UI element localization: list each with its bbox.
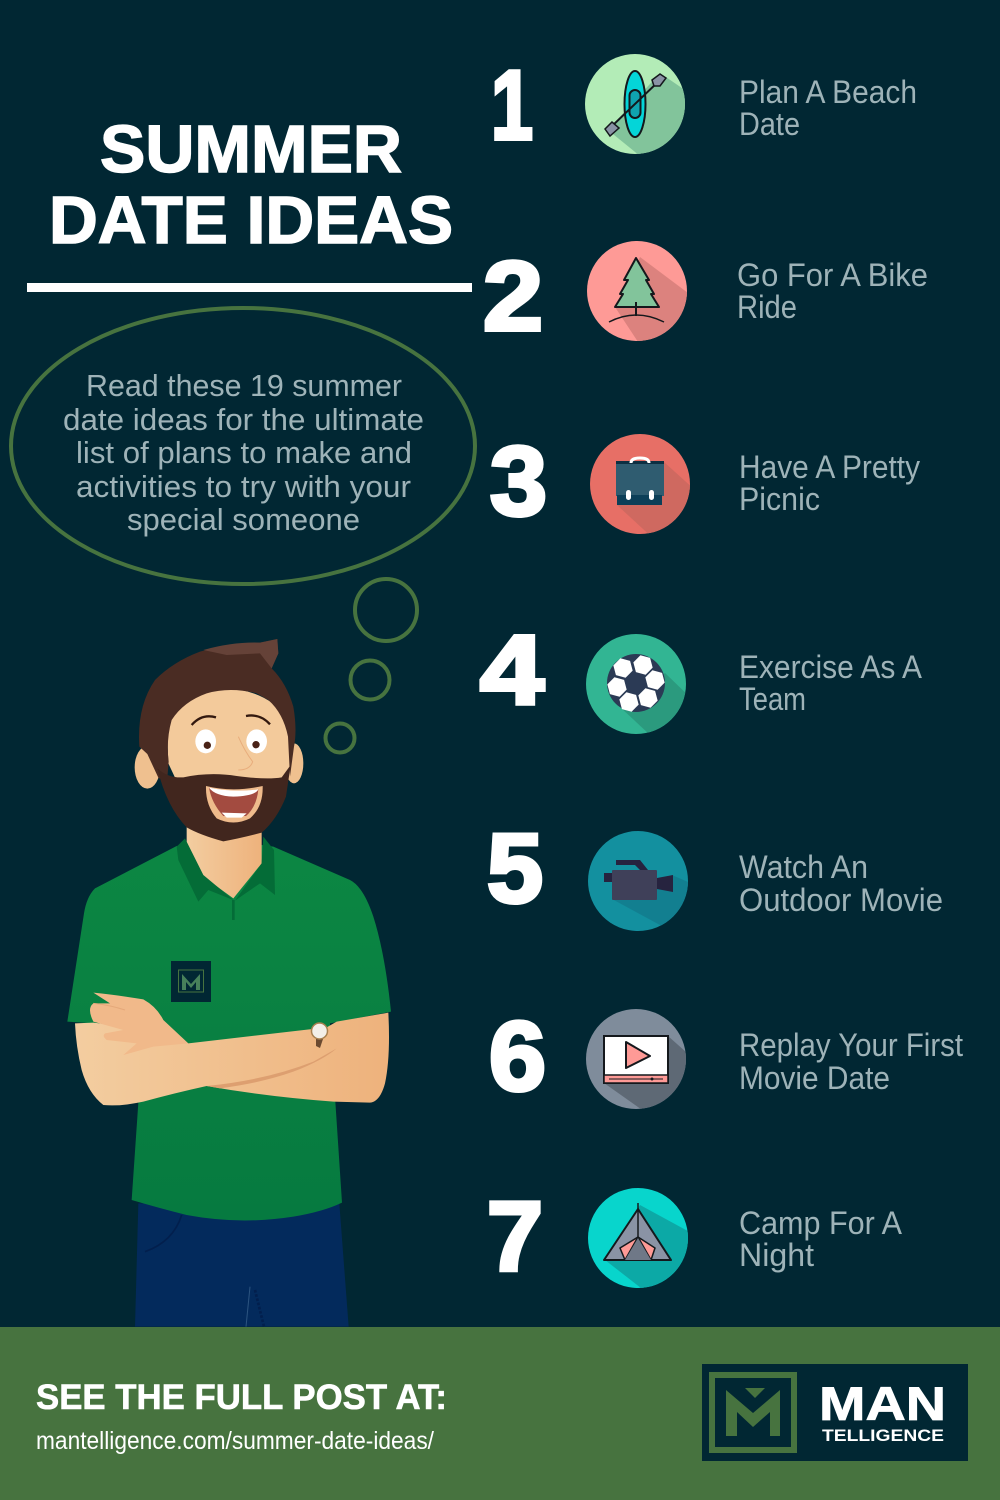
item 6: label: Movie Date [739, 1060, 890, 1096]
item 2: tree icon [587, 241, 692, 345]
logo [702, 1364, 968, 1461]
shirt [67, 840, 391, 1220]
eyes [195, 729, 216, 753]
item 7: label [739, 1205, 903, 1273]
shirt badge [171, 961, 211, 1002]
item 3: bag icon [590, 434, 690, 534]
item 5: video camera icon [588, 831, 688, 931]
item 2: label [737, 257, 928, 325]
item 7: label: Camp For A [739, 1205, 903, 1241]
trousers [135, 1203, 349, 1327]
illustration: man with crossed arms [67, 639, 391, 1327]
title [49, 112, 453, 258]
title: SUMMER [100, 112, 402, 187]
item 4: label: Exercise As A [739, 649, 923, 685]
mouth [206, 786, 263, 822]
footer url: mantelligence.com/summer-date-ideas/ [36, 1427, 434, 1455]
neck and head [135, 639, 303, 920]
item 3: label: Picnic [739, 481, 820, 517]
item 4: number: 4 [480, 615, 544, 725]
item 3: number: 3 [490, 426, 547, 536]
thought bubble: list of plans to make and [76, 435, 412, 470]
logo: MAN [819, 1377, 946, 1430]
footer band [0, 1327, 1000, 1500]
thought bubble: activities to try with your [76, 469, 411, 504]
thought bubble: Read these 19 summer [86, 368, 402, 403]
item 7: label: Night [739, 1237, 814, 1273]
item 5: number: 5 [487, 813, 543, 923]
item 4: label [739, 649, 923, 717]
arms [75, 993, 389, 1105]
item 6: label [739, 1027, 963, 1096]
thought bubble: special someone [127, 502, 360, 537]
item 1: kayak icon [585, 54, 685, 154]
item 1: label: Date [739, 106, 800, 142]
item 3: label [739, 449, 920, 517]
item 2: number: 2 [483, 241, 543, 351]
item 3: label: Have A Pretty [739, 449, 920, 485]
thought bubble [11, 308, 475, 752]
item 5: label [739, 849, 943, 918]
item 5: label: Watch An [739, 849, 868, 885]
collar [177, 837, 275, 902]
item 7: number: 7 [487, 1181, 543, 1291]
logo: TELLIGENCE [822, 1426, 944, 1445]
item 7: tent icon [588, 1188, 688, 1288]
item 2: label: Ride [737, 289, 797, 325]
item 4: soccer ball icon [586, 634, 695, 735]
item 4: label: Team [739, 681, 806, 717]
item 1: label: Plan A Beach [739, 74, 917, 110]
item 1: label [739, 74, 917, 142]
item 5: label: Outdoor Movie [739, 882, 943, 918]
thought bubble: date ideas for the ultimate [63, 402, 424, 437]
item 2: label: Go For A Bike [737, 257, 928, 293]
wristwatch [312, 1023, 328, 1048]
title: DATE IDEAS [49, 183, 453, 258]
item 6: video player icon [586, 1009, 686, 1109]
footer call to action: SEE THE FULL POST AT: [36, 1378, 447, 1417]
item 6: label: Replay Your First [739, 1027, 963, 1063]
item 6: number: 6 [489, 1001, 546, 1111]
item 1: number: 1 [491, 50, 533, 160]
